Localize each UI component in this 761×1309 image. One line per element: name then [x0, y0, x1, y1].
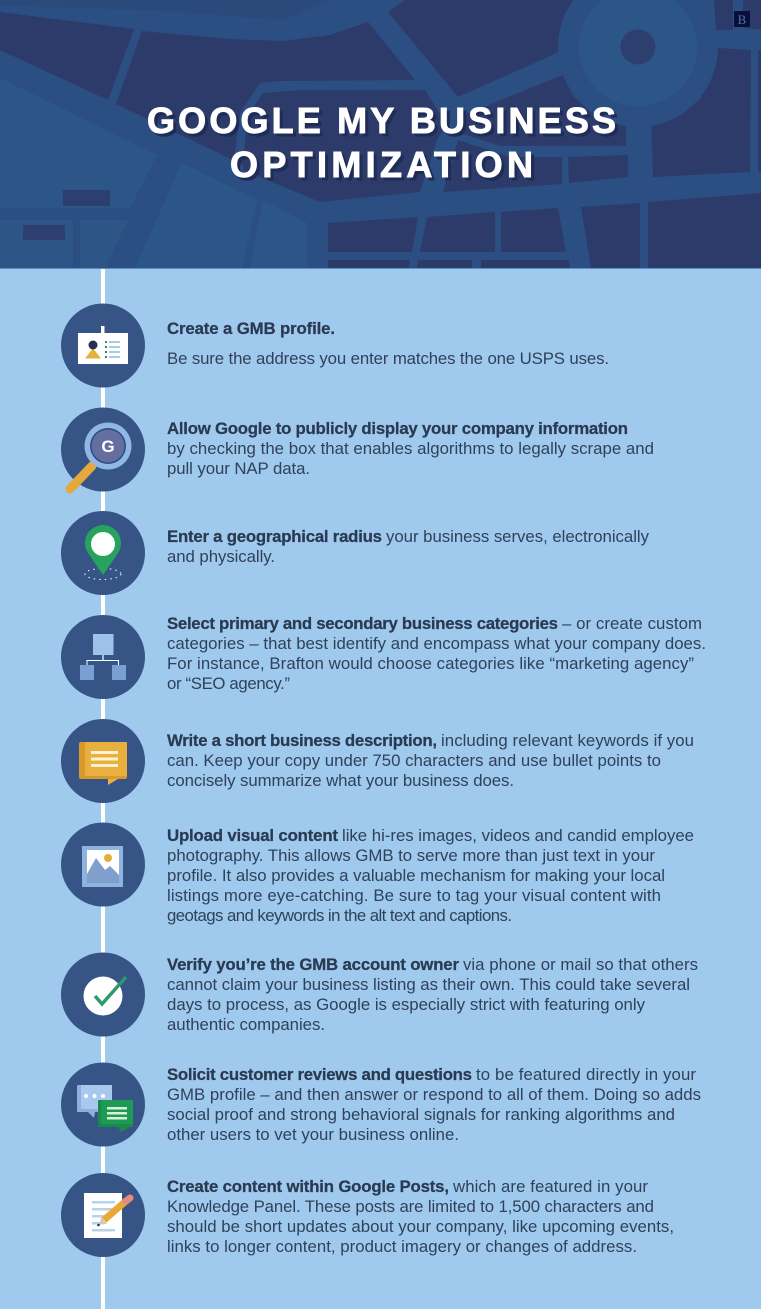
step 7 text — [167, 955, 698, 1034]
step 6 text: Upload visual content — [167, 826, 338, 845]
step 6 text: geotags and keywords in the alt text and captions. — [167, 906, 512, 925]
step 1 text — [167, 319, 609, 368]
step 9 icon: document and pencil — [61, 1173, 145, 1257]
step 3 text: and physically. — [167, 547, 275, 566]
title: OPTIMIZATION — [230, 144, 533, 185]
step 1 text: Be sure the address you enter matches the one USPS uses. — [167, 349, 609, 368]
title: GOOGLE MY BUSINESS — [147, 100, 616, 141]
step 4 text: categories – that best identify and encompass what your company does. — [167, 634, 706, 653]
step 5 text: Write a short business description, — [167, 731, 437, 750]
title — [147, 100, 616, 185]
step 2 text — [167, 419, 654, 478]
step 8 text — [167, 1065, 701, 1144]
step 9 text: links to longer content, product imagery or changes of address. — [167, 1237, 637, 1256]
step 6 text — [167, 826, 694, 925]
step 4 text: – or create custom — [562, 614, 702, 633]
timeline line — [101, 269, 105, 1309]
step 8 text: social proof and strong behavioral signals for ranking algorithms and — [167, 1105, 675, 1124]
step 7 text: authentic companies. — [167, 1015, 325, 1034]
step 7 text: Verify you’re the GMB account owner — [167, 955, 459, 974]
step 4 text: For instance, Brafton would choose categories like “marketing agency” — [167, 654, 694, 673]
step 2 icon: magnifying glass — [61, 408, 145, 492]
step 8 text: Solicit customer reviews and questions — [167, 1065, 472, 1084]
step 4 text: Select primary and secondary business categories — [167, 614, 558, 633]
step 5 icon: speech bubble — [61, 719, 145, 803]
step 2 text: by checking the box that enables algorithms to legally scrape and — [167, 439, 654, 458]
step 6 text: photography. This allows GMB to serve more than just text in your — [167, 846, 655, 865]
step 2 text: pull your NAP data. — [167, 459, 310, 478]
step 4 text — [167, 614, 706, 693]
step 1 text: Create a GMB profile. — [167, 319, 335, 338]
step 9 text: Create content within Google Posts, — [167, 1177, 449, 1196]
step 9 text: Knowledge Panel. These posts are limited to 1,500 characters and — [167, 1197, 654, 1216]
step 6 text: listings more eye-catching. Be sure to tag your visual content with — [167, 886, 661, 905]
logo badge — [734, 11, 750, 27]
step 4 text: or “SEO agency.” — [167, 674, 290, 693]
step 6 icon: image frame — [61, 822, 145, 906]
step 8 text: to be featured directly in your — [476, 1065, 696, 1084]
step 3 text: your business serves, electronically — [386, 527, 650, 546]
step 7 text: via phone or mail so that others — [463, 955, 698, 974]
logo badge: B — [738, 12, 747, 27]
step 3 text — [167, 527, 650, 566]
step 3 icon: map pin — [61, 511, 145, 595]
step 9 text: should be short updates about your company, like upcoming events, — [167, 1217, 674, 1236]
step 3 text: Enter a geographical radius — [167, 527, 382, 546]
step 7 text: cannot claim your business listing as their own. This could take several — [167, 975, 690, 994]
step 8 text: other users to vet your business online. — [167, 1125, 459, 1144]
step 2 text: Allow Google to publicly display your company information — [167, 419, 628, 438]
step 5 text: can. Keep your copy under 750 characters and use bullet points to — [167, 751, 661, 770]
step 8 icon: review bubbles — [61, 1062, 145, 1146]
step 4 icon: hierarchy chart — [61, 615, 145, 699]
step 9 text — [167, 1177, 674, 1256]
step 9 text: which are featured in your — [452, 1177, 648, 1196]
step 1 icon: ID card — [61, 304, 145, 388]
step 5 text: concisely summarize what your business does. — [167, 771, 514, 790]
step 2 icon: magnifying glass: G — [101, 437, 115, 456]
step 7 icon: check mark — [61, 952, 145, 1036]
step 5 text — [167, 731, 694, 790]
step 7 text: days to process, as Google is especially strict with featuring only — [167, 995, 646, 1014]
step 6 text: like hi-res images, videos and candid employee — [342, 826, 694, 845]
step 6 text: profile. It also provides a valuable mechanism for making your local — [167, 866, 665, 885]
step 8 text: GMB profile – and then answer or respond to all of them. Doing so adds — [167, 1085, 701, 1104]
header map — [0, 0, 761, 269]
step 5 text: including relevant keywords if you — [441, 731, 694, 750]
